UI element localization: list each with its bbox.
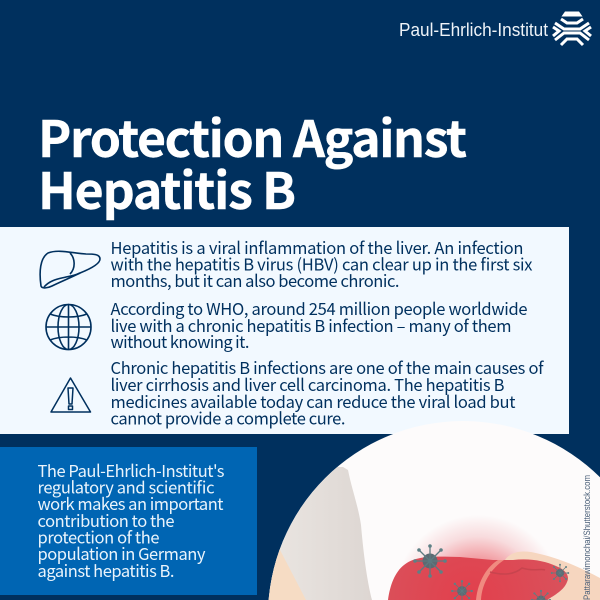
panel: blue statement box: contribution to the bbox=[38, 508, 174, 532]
text: hepatitis definition bbox=[110, 235, 532, 292]
panel: blue statement box: work makes an important bbox=[38, 491, 224, 515]
text: WHO figures: without knowing it. bbox=[110, 329, 250, 353]
panel: facts bbox=[0, 227, 569, 434]
panel: blue statement box: regulatory and scientific bbox=[38, 474, 214, 498]
text: WHO figures bbox=[110, 296, 528, 353]
text: chronic consequences bbox=[110, 355, 544, 430]
panel: blue statement box: against hepatitis B. bbox=[38, 558, 174, 582]
title: Hepatitis B bbox=[38, 152, 296, 224]
photo credit: Pattarawimonchai/Shutterstock.com bbox=[582, 475, 592, 600]
text: hepatitis definition: Hepatitis is a viral inflammation of the liver. An infection bbox=[110, 235, 524, 259]
icon: liver bbox=[40, 251, 100, 288]
panel: blue statement box bbox=[0, 447, 257, 595]
text: hepatitis definition: months, but it can also become chronic. bbox=[110, 268, 400, 292]
title: Protection Against bbox=[38, 100, 467, 172]
text: chronic consequences: Chronic hepatitis B infections are one of the main causes of bbox=[110, 355, 544, 379]
logo: Paul-Ehrlich-Institut bbox=[399, 12, 591, 45]
panel: blue statement box: population in Germany bbox=[38, 541, 206, 565]
panel: blue statement box: protection of the bbox=[38, 524, 160, 548]
icon: globe bbox=[46, 304, 91, 350]
panel: blue statement box: The Paul-Ehrlich-Institut's bbox=[38, 458, 225, 482]
text: chronic consequences: cannot provide a complete cure. bbox=[110, 406, 346, 430]
photo: liver illustration in circle bbox=[255, 415, 600, 600]
text: chronic consequences: liver cirrhosis and liver cell carcinoma. The hepatitis B bbox=[110, 372, 505, 396]
logo: Paul-Ehrlich-Institut: Paul-Ehrlich-Institut bbox=[399, 20, 548, 40]
text: WHO figures: According to WHO, around 254 million people worldwide bbox=[110, 296, 528, 320]
text: hepatitis definition: with the hepatitis B virus (HBV) can clear up in the first six bbox=[110, 252, 532, 276]
icon: warning triangle bbox=[51, 378, 90, 412]
title bbox=[38, 100, 467, 224]
text: WHO figures: live with a chronic hepatitis B infection – many of them bbox=[110, 313, 512, 337]
text: chronic consequences: medicines available today can reduce the viral load but bbox=[110, 389, 516, 413]
